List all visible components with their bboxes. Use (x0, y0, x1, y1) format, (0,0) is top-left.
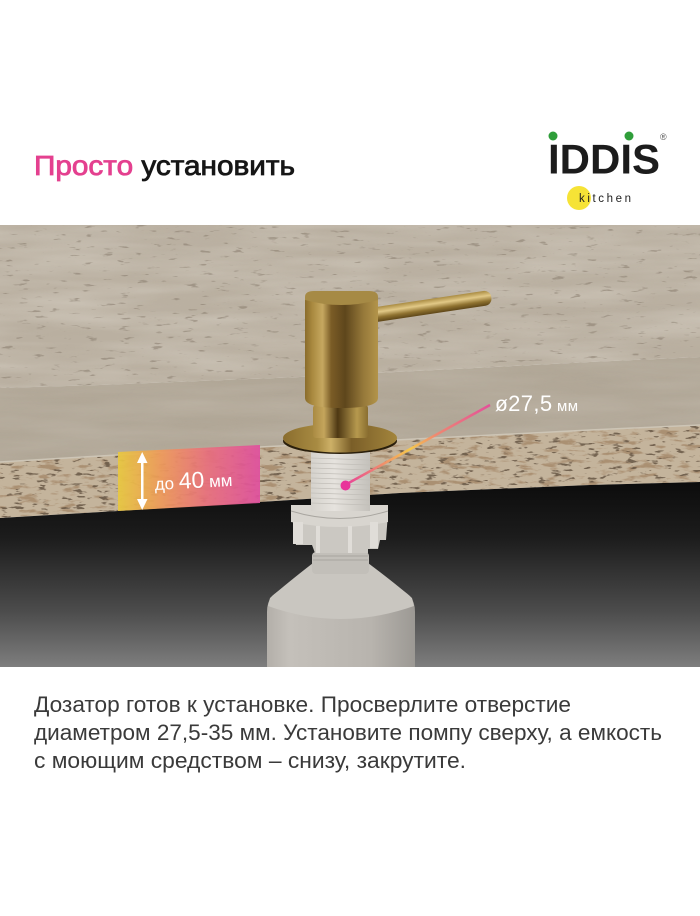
registered mark: ® (660, 132, 667, 142)
dispenser bottle (267, 552, 415, 667)
logo kitchen label: kitchen (579, 193, 631, 205)
dark cabinet background (0, 482, 700, 667)
leader dot (340, 480, 350, 490)
description line 2: диаметром 27,5-35 мм. Установите помпу сверху, а емкость (34, 720, 662, 745)
threaded pipe (311, 452, 370, 511)
flange shadow (283, 428, 397, 454)
thickness band (118, 445, 260, 511)
countertop top surface (0, 225, 700, 390)
description line 1: Дозатор готов к установке. Просверлите отверстие (34, 692, 571, 717)
head cylinder (305, 298, 378, 408)
gold flange (283, 424, 397, 454)
bottle neck (312, 552, 369, 574)
countertop front face (0, 355, 700, 465)
bottle body (267, 563, 415, 667)
thickness label: до 40 мм (154, 465, 233, 495)
head cap (305, 291, 378, 305)
pipe body (311, 452, 370, 511)
diameter label: ø27,5 мм (495, 391, 578, 416)
description line 3: с моющим средством – снизу, закрутите. (34, 748, 466, 773)
logo: IDDIS kitchen (548, 132, 667, 210)
logo wordmark: IDDIS (548, 136, 660, 182)
granite edge (0, 423, 700, 520)
pipe threads (311, 458, 370, 505)
diameter leader line (340, 405, 490, 490)
logo yellow circle (567, 186, 591, 210)
gold neck (313, 405, 368, 438)
logo green dots (548, 132, 634, 140)
dispenser head (305, 291, 378, 408)
flange disc (283, 424, 397, 452)
bottle shoulder highlight (268, 563, 414, 619)
leader stroke (345, 405, 490, 485)
nut ribs (293, 522, 378, 553)
bottle neck rings (313, 556, 368, 560)
nut rim line (291, 511, 388, 518)
thickness arrow (137, 452, 148, 510)
title: Просто установить (34, 150, 295, 181)
infographic canvas (0, 132, 700, 772)
mounting nut (291, 505, 388, 553)
spout (368, 290, 492, 323)
nut body and lugs (292, 513, 388, 553)
photo: countertop and dispenser (0, 225, 700, 667)
description text (34, 692, 662, 773)
nut flange (291, 505, 388, 527)
edge highlight (0, 425, 700, 462)
